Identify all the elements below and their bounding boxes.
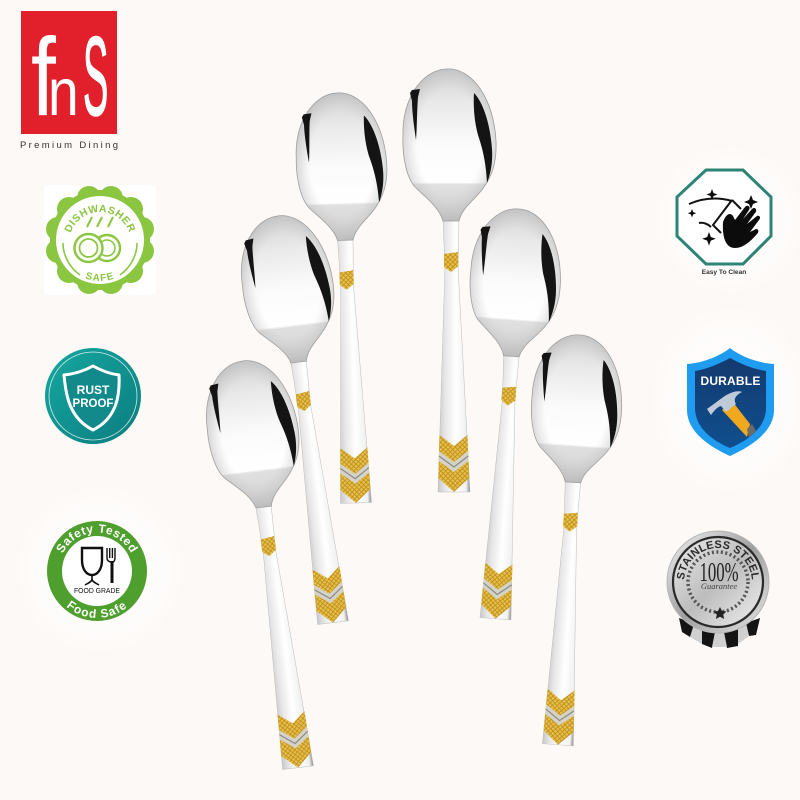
badge: dishwasher safe [44, 185, 156, 295]
logo: FnS Premium Dining: S [83, 13, 108, 139]
spoon: back centre left [294, 92, 397, 504]
logo tagline: Premium Dining [20, 140, 118, 151]
logo: FnS Premium Dining: n [48, 55, 79, 130]
badge: dishwasher safe: SAFE [86, 272, 114, 282]
spoon: front right [508, 332, 627, 748]
spoon: back centre right [403, 69, 496, 492]
icon: easy to clean [677, 170, 771, 276]
badge: dishwasher safe: DISHWASHER [64, 204, 135, 232]
badge: food safe: Safety Tested [56, 524, 138, 552]
icon caption: Easy To Clean [702, 269, 746, 276]
badge: food safe: FOOD GRADE [74, 586, 120, 595]
badge: stainless steel guarantee: STAINLESS STEEL [676, 540, 759, 580]
badge: food safe: Food Safe [66, 600, 126, 618]
badge: rust proof: PROOF [73, 398, 113, 410]
spoon: middle right [446, 206, 566, 622]
badge: durable: DURABLE [700, 374, 761, 388]
badge: stainless steel guarantee: Guarantee [701, 581, 737, 591]
badge: stainless steel guarantee: 100% [699, 557, 739, 587]
spoon: middle left [235, 210, 374, 629]
logo: FnS Premium Dining [20, 11, 118, 151]
badge: rust proof [45, 348, 141, 444]
badge: stainless steel guarantee [666, 530, 770, 648]
badge: rust proof: RUST [77, 383, 110, 397]
badge: food safe [47, 521, 147, 621]
badge: durable [687, 348, 774, 456]
logo: FnS Premium Dining: f [31, 16, 57, 139]
spoon: front left [200, 355, 339, 774]
